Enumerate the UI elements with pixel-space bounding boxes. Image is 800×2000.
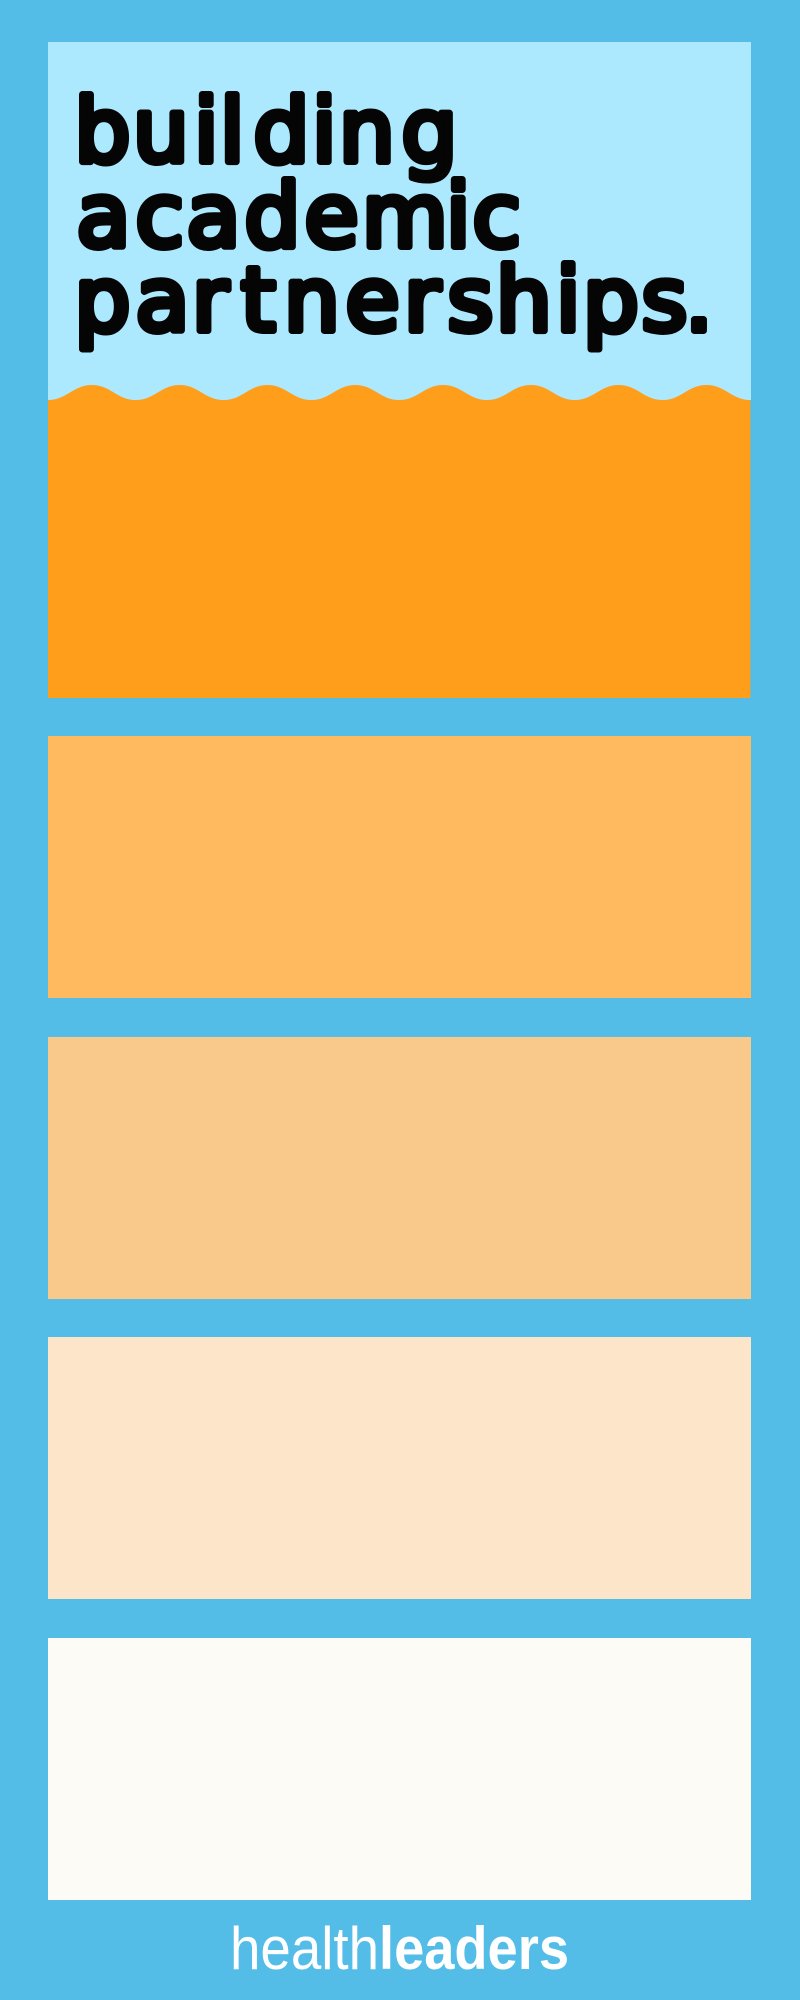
title: partnerships. [74,248,713,352]
orange wave block [48,385,750,698]
panel: second [48,736,751,998]
header sky area [48,42,751,400]
logo: healthleaders: health [230,1915,379,1982]
title [74,80,713,352]
title: academic [76,164,521,268]
panel: header with title and wave [48,42,751,698]
panel: third [48,1037,751,1299]
panel: fifth [48,1638,751,1900]
logo: healthleaders: leaders [379,1915,569,1982]
title: building [74,80,457,182]
panel: fourth [48,1337,751,1599]
logo: healthleaders [230,1915,569,1982]
